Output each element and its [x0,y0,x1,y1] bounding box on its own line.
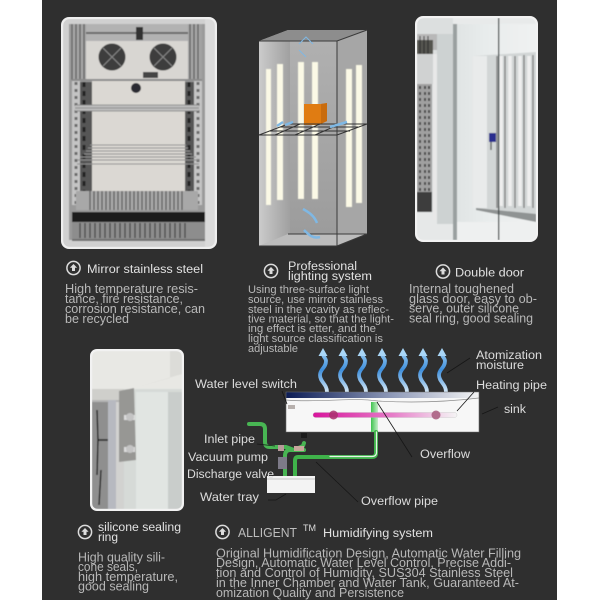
heading: alligent humidifying system: TM [303,523,316,533]
label: vacuum pump: Vacuum pump [188,450,268,464]
heading: alligent humidifying system [216,523,433,540]
panel: mirror stainless steel photo [61,17,217,249]
heading: professional lighting system: lighting system [288,269,372,283]
label: water level switch: Water level switch [195,377,297,391]
heating pipe [313,410,457,420]
diagram: humidifying system [187,348,547,508]
text: mirror stainless steel description [65,282,205,326]
panel: silicone sealing ring photo [90,349,184,511]
text: humidifying system description: omization Quality and Persistence [216,586,404,600]
text: double door description [409,282,537,326]
text: silicone sealing description: High quality sili- [78,550,165,564]
heading: double door: Double door [455,266,524,280]
sink tank [286,392,479,432]
airflow arrows [277,37,347,238]
text: lighting system description [248,284,394,355]
text: lighting system description: Using three-surface light [248,284,369,296]
heading: mirror stainless steel: Mirror stainless steel [87,262,203,276]
text: double door description: glass door, easy to ob- [409,292,537,306]
green pipes [249,424,376,479]
text: humidifying system description: Design, Automatic Water Level Control, Precise Addi- [216,556,511,570]
label: overflow pipe: Overflow pipe [361,494,438,508]
heading: silicone sealing ring [78,520,181,544]
label: atomization moisture: moisture [476,358,524,372]
text: silicone sealing description: high temperature, [78,570,178,584]
moisture arrows [318,348,446,392]
text: humidifying system description: tion and Control of Humidity, SUS304 Stainless Steel [216,566,513,580]
heading: alligent humidifying system: Humidifying system [323,526,433,540]
label: heating pipe: Heating pipe [476,378,547,392]
wire shelf [259,124,367,135]
label: discharge valve: Discharge valve [187,467,274,481]
text: humidifying system description: in the Inner Chamber and Water Tank, Guaranteed At- [216,576,519,590]
orange box [304,103,327,125]
text: silicone sealing description: cone seals, [78,560,138,574]
label: inlet pipe: Inlet pipe [204,432,255,446]
text: silicone sealing description: good sealing [78,580,149,594]
text: lighting system description: light source classification is [248,333,384,345]
text: double door description: Internal toughened [409,282,514,296]
text: lighting system description: ing effect is etter, and the [248,323,376,335]
water level switch sensor [288,405,295,409]
heading: silicone sealing ring: ring [98,530,118,544]
label: atomization moisture: Atomization [476,348,542,362]
text: lighting system description: source, use mirror stainless [248,294,383,306]
panel: double door photo [415,16,538,242]
overflow standpipe [371,402,378,432]
heading: professional lighting system [264,259,372,283]
text: mirror stainless steel description: High temperature resis- [65,282,198,296]
text: lighting system description: steel in the vcavity as reflec- [248,304,389,316]
label: overflow: Overflow [420,447,470,461]
leader lines [257,358,498,502]
text: silicone sealing description [78,550,178,594]
text: lighting system description: tive material, so that the light- [248,314,394,326]
label: water tray: Water tray [200,490,260,504]
text: lighting system description: adjustable [248,343,298,355]
text: double door description: serve, outer silicone [409,302,519,316]
label: atomization moisture [476,348,542,372]
text: double door description: seal ring, good sealing [409,312,533,326]
label: sink: sink [504,402,527,416]
water tray [267,476,315,493]
text: mirror stainless steel description: tance, fire resistance, [65,292,183,306]
heading: silicone sealing ring: silicone sealing [98,520,181,534]
text: mirror stainless steel description: corrosion resistance, can [65,302,205,316]
heading: professional lighting system: Professional [288,259,357,273]
valves [278,433,307,469]
text: mirror stainless steel description: be recycled [65,312,129,326]
text: humidifying system description [216,546,521,600]
panel: lighting chamber diagram [259,30,367,246]
text: humidifying system description: Original Humidification Design, Automatic Water Filling [216,546,521,560]
heading: alligent humidifying system: ALLIGENT [238,525,297,540]
